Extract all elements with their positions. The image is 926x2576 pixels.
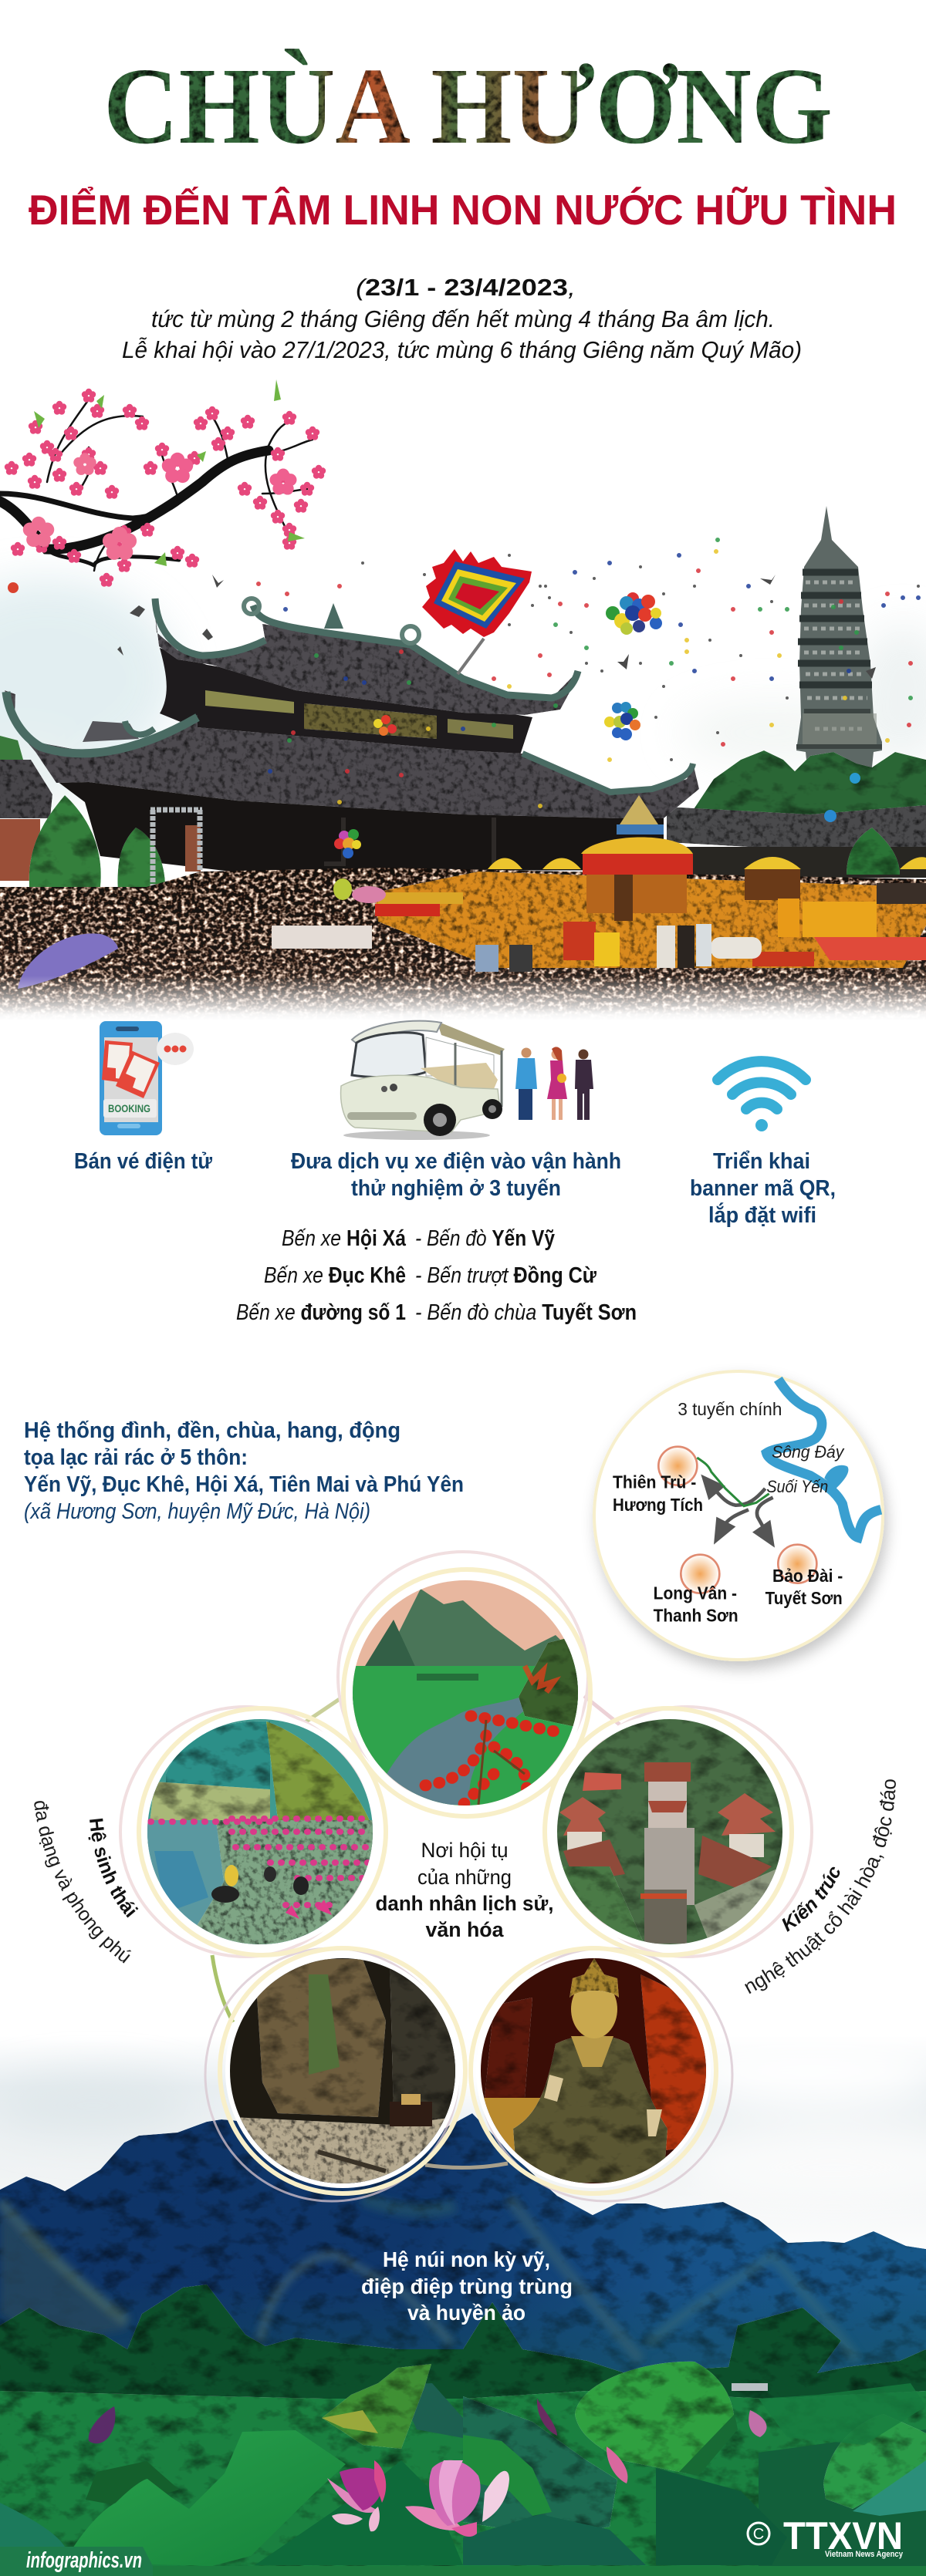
map labels: 3 tuyến chính: [678, 1399, 782, 1419]
flying flag: [422, 549, 532, 674]
photo: cave entrance: [230, 1958, 455, 2187]
connector lines between photos: [212, 1696, 620, 2168]
shuttle routes list: Bến xe Đục Khê: [264, 1263, 406, 1288]
white text: mountains: và huyền ảo: [407, 2301, 526, 2325]
purple umbrella: [18, 933, 118, 989]
shuttle routes list: - Bến trượt Đồng Cừ: [415, 1263, 596, 1288]
white text: mountains: điệp điệp trùng trùng: [361, 2274, 573, 2298]
back small roof: [83, 721, 139, 742]
center text: historic figures: danh nhân lịch sử,: [375, 1892, 554, 1915]
TTXVN logo: TTXVN: [783, 2514, 903, 2557]
caption: QR banner and wifi: Triển khai: [713, 1149, 810, 1174]
lower roof: [5, 690, 699, 818]
festival dates text block: tức từ mùng 2 tháng Giêng đến hết mùng 4 tháng Ba âm lịch.: [151, 305, 775, 332]
shuttle routes list: Bến xe đường số 1: [236, 1300, 406, 1325]
gold decorated panels: [205, 690, 513, 739]
caption: QR banner and wifi: lắp đặt wifi: [708, 1202, 816, 1228]
dark building body: [54, 779, 664, 872]
stage truss: [150, 810, 202, 899]
center text: historic figures: Nơi hội tụ: [421, 1839, 508, 1862]
photo: valley and river: [353, 1580, 579, 1812]
upper roof: [154, 598, 578, 715]
route map circle: Hương Tích: [613, 1495, 703, 1515]
icon: electric shuttle bus: [341, 1021, 505, 1140]
center text: historic figures: văn hóa: [426, 1918, 504, 1941]
statue body: [513, 2035, 667, 2183]
festival dates text block: [122, 274, 802, 363]
caption: electric vehicle service: [291, 1149, 621, 1201]
curved label: architecture: nghệ thuật cổ hài hòa, độc đáo: [745, 1779, 896, 1994]
hands: [544, 2075, 662, 2136]
festival dates text block: Lễ khai hội vào 27/1/2023, tức mùng 6 tháng Giêng năm Quý Mão): [122, 336, 802, 363]
route map circle: Tuyết Sơn: [765, 1588, 843, 1608]
lotus buds: [89, 2406, 115, 2443]
route paths and arrows: [714, 1489, 765, 1505]
center text: historic figures: của những: [417, 1866, 512, 1889]
caption: electric vehicle service: thử nghiệm ở 3 tuyến: [351, 1176, 561, 1201]
route map circle: Sông Đáy: [772, 1442, 845, 1462]
tickets: [102, 1040, 133, 1084]
side hall: [0, 760, 52, 818]
route map circle: Thanh Sơn: [654, 1605, 738, 1625]
caption: QR banner and wifi: [690, 1149, 836, 1228]
festival dates text block: (23/1 - 23/4/2023 ,: [356, 274, 576, 301]
caption: electric vehicle service: Đưa dịch vụ xe điện vào vận hành: [291, 1149, 621, 1174]
icon: three people: [515, 1047, 593, 1120]
lotus field: [0, 2391, 926, 2576]
background trees: [691, 750, 926, 818]
photo: lotus stream: [147, 1719, 373, 1947]
right side hall: [667, 805, 926, 850]
text block: village system: [24, 1418, 464, 1524]
balloons: [8, 582, 860, 858]
shuttle routes list: [236, 1226, 637, 1325]
icon: booking phone: [100, 1021, 194, 1135]
route map circle: Long Vân -: [654, 1583, 737, 1603]
photo ring decorations: [120, 1552, 812, 2201]
tree line: [0, 2284, 926, 2445]
umbrellas: [488, 857, 926, 869]
head and crown: [571, 1991, 617, 2038]
leaves: [34, 379, 305, 566]
center text: historic figures: [375, 1839, 554, 1941]
sky: [0, 578, 926, 810]
shuttle routes list: - Bến đò chùa Tuyết Sơn: [415, 1300, 637, 1325]
icon: booking phone: BOOKING: [108, 1102, 150, 1114]
caption: QR banner and wifi: banner mã QR,: [690, 1176, 836, 1201]
foreground trees: [29, 795, 900, 892]
footer bar: infographics.vn: [26, 2548, 142, 2573]
curved label: ecosystem: Hệ sinh thái: [88, 1819, 139, 1917]
bottom fade of hero: [0, 976, 926, 1021]
temple building: [0, 598, 699, 881]
route map circle: Thiên Trù -: [613, 1472, 696, 1492]
curved label: architecture: Kiến trúc: [782, 1866, 840, 1932]
curved label: ecosystem: đa dạng và phong phú: [34, 1801, 131, 1964]
photo: golden Buddha statue: [481, 1958, 706, 2183]
route map circle: Suối Yến: [766, 1477, 828, 1496]
cherry blossom branch: [0, 379, 326, 587]
text block: village system: (xã Hương Sơn, huyện Mỹ Đức, Hà Nội): [24, 1499, 370, 1524]
speech bubble: [157, 1033, 194, 1065]
TTXVN logo: C: [753, 2526, 764, 2543]
crowd: [0, 868, 926, 1022]
lotus leaves: [0, 2362, 926, 2576]
small left lower wing: [125, 721, 154, 734]
mountain ridge highlights: [0, 2198, 857, 2360]
route map circle: Bảo Đài -: [772, 1566, 843, 1586]
bottom landscape background: [0, 2028, 926, 2576]
shuttle routes list: - Bến đò Yến Vỹ: [415, 1226, 555, 1251]
altar: [620, 795, 658, 824]
destination markers: [658, 1447, 697, 1485]
ceremony stage: [272, 795, 926, 972]
doves: [117, 575, 876, 679]
subtitle: ĐIỂM ĐẾN TÂM LINH NON NƯỚC HỮU TÌNH: [29, 186, 897, 234]
mountains: [0, 2113, 926, 2406]
hero photo: temple festival: [0, 506, 926, 1024]
standing attendees: [657, 926, 675, 968]
white text: mountains: [361, 2247, 573, 2325]
text block: village system: Hệ thống đình, đền, chùa, hang, động: [24, 1418, 400, 1443]
river: [766, 1379, 881, 1537]
cloudy sky: [0, 2036, 926, 2267]
lotus flowers: [89, 2399, 767, 2537]
big left leaf: [65, 2430, 346, 2566]
text block: village system: tọa lạc rải rác ở 5 thôn:: [24, 1445, 248, 1470]
gold curtain, carpet, banners: [803, 902, 877, 937]
route map circle: [594, 1371, 883, 1660]
confetti: [259, 540, 918, 806]
caption: e-ticket: Bán vé điện tử: [74, 1149, 212, 1174]
booking button: [103, 1099, 157, 1118]
pagoda tower: [796, 506, 882, 767]
icon: wifi: [718, 1061, 806, 1128]
footer bar: [0, 2547, 926, 2576]
text block: village system: Yến Vỹ, Đục Khê, Hội Xá, Tiên Mai và Phú Yên: [24, 1472, 464, 1497]
upper hall dark wall: [160, 648, 532, 760]
photo: pagoda complex aerial: [557, 1719, 782, 1944]
shuttle routes list: Bến xe Hội Xá: [282, 1226, 407, 1251]
blossoms: [5, 389, 326, 587]
white text: mountains: Hệ núi non kỳ vỹ,: [383, 2247, 550, 2271]
title: CHÙA HƯƠNG: [103, 45, 833, 167]
branch: [0, 400, 313, 571]
TTXVN logo: Vietnam News Agency: [825, 2550, 904, 2559]
